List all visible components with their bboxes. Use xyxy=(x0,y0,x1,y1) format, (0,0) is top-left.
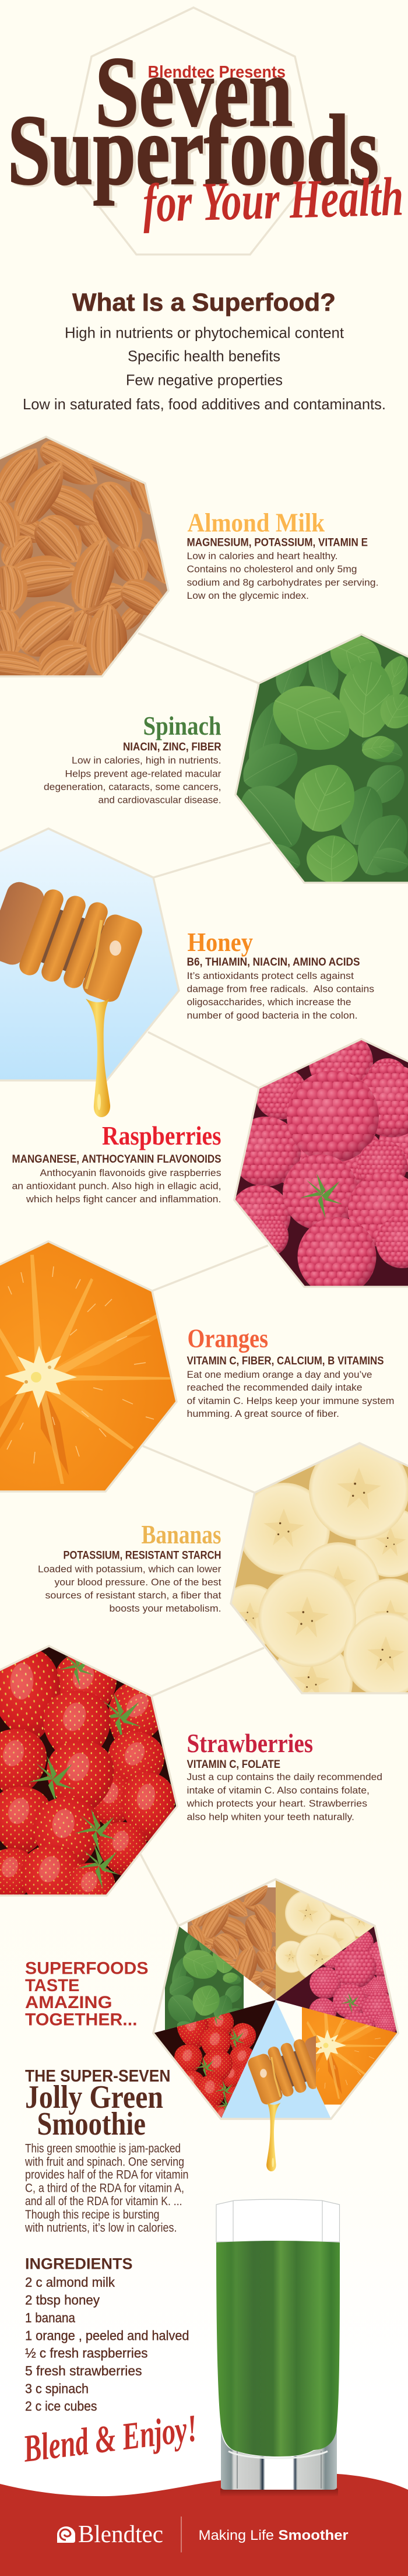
panel: raspberry photo xyxy=(230,1030,408,1296)
icon: honey dipper with drip xyxy=(0,879,145,1117)
spinach description: Helps prevent age-related macular xyxy=(65,768,221,779)
strawberries description: which protects your heart. Strawberries xyxy=(186,1798,367,1809)
panel: recipe heading xyxy=(25,2067,170,2142)
ingredients list: 1 banana xyxy=(25,2310,75,2325)
glass shadow xyxy=(220,2489,338,2497)
recipe description: with fruit and spinach. One serving xyxy=(24,2155,184,2169)
recipe description: with nutrients, it’s low in calories. xyxy=(24,2221,177,2234)
bananas description xyxy=(38,1564,221,1614)
panel: almond milk text xyxy=(187,507,379,601)
ingredients list: 2 tbsp honey xyxy=(25,2293,100,2308)
raspberries description: which helps fight cancer and inflammation. xyxy=(26,1194,221,1205)
honey description: It’s antioxidants protect cells against xyxy=(187,970,354,981)
list of criteria: Low in saturated fats, food additives and contaminants. xyxy=(23,395,386,413)
strawberries description: also help whiten your teeth naturally. xyxy=(187,1811,354,1823)
almond description: sodium and 8g carbohydrates per serving. xyxy=(187,577,379,588)
bananas description: Loaded with potassium, which can lower xyxy=(38,1564,221,1574)
almond description: Low in calories and heart healthy. xyxy=(187,550,338,561)
panel: oranges text xyxy=(187,1324,394,1419)
spinach heading: Spinach xyxy=(143,711,221,740)
spinach description: degeneration, cataracts, some cancers, xyxy=(44,781,221,792)
almond description: Contains no cholesterol and only 5mg xyxy=(187,563,357,575)
oranges nutrients: VITAMIN C, FIBER, CALCIUM, B VITAMINS xyxy=(187,1355,384,1367)
panel: spinach text xyxy=(44,711,221,806)
icon: composite honey dipper xyxy=(248,2036,316,2171)
ingredients list: 2 c almond milk xyxy=(25,2275,115,2290)
almond description xyxy=(187,550,379,601)
ingredients heading: INGREDIENTS xyxy=(25,2255,133,2273)
almond description: Low on the glycemic index. xyxy=(187,590,309,601)
strawberries description: intake of vitamin C. Also contains folate, xyxy=(187,1785,370,1796)
ingredients list xyxy=(25,2275,189,2414)
recipe name: Smoothie xyxy=(37,2106,146,2142)
bananas nutrients: POTASSIUM, RESISTANT STARCH xyxy=(63,1550,221,1561)
honey description: oligosaccharides, which increase the xyxy=(187,996,351,1008)
callout: superfoods taste amazing together: SUPERFOODS xyxy=(25,1959,149,1978)
panel: honey photo xyxy=(0,829,179,1117)
footer band xyxy=(0,2473,408,2576)
ingredients list: 3 c spinach xyxy=(25,2381,89,2396)
recipe description xyxy=(24,2142,189,2234)
callout: blend and enjoy: Blend & Enjoy! xyxy=(20,2407,200,2470)
strawberries heading: Strawberries xyxy=(187,1728,313,1758)
recipe description: provides half of the RDA for vitamin xyxy=(25,2168,189,2182)
honey nutrients: B6, THIAMIN, NIACIN, AMINO ACIDS xyxy=(187,956,360,968)
honey description xyxy=(187,970,374,1021)
spinach nutrients: NIACIN, ZINC, FIBER xyxy=(123,741,221,753)
ingredients list: 2 c ice cubes xyxy=(25,2399,97,2414)
raspberries nutrients: MANGANESE, ANTHOCYANIN FLAVONOIDS xyxy=(12,1153,221,1166)
panel: banana photo xyxy=(230,1442,408,1694)
panel: composite superfoods heptagon xyxy=(152,1868,402,2171)
raspberries heading: Raspberries xyxy=(102,1121,221,1150)
title: presenter line: Blendtec Presents xyxy=(148,63,286,82)
bananas description: boosts your metabolism. xyxy=(110,1603,221,1614)
bananas heading: Bananas xyxy=(141,1519,221,1549)
panel: orange photo xyxy=(0,1236,187,1496)
list of criteria: Specific health benefits xyxy=(128,348,280,365)
ingredients list: ½ c fresh raspberries xyxy=(25,2345,148,2360)
title: main heading xyxy=(8,37,379,206)
raspberries description: Anthocyanin flavonoids give raspberries xyxy=(40,1167,221,1178)
title xyxy=(8,37,404,234)
spinach description: Low in calories, high in nutrients. xyxy=(72,754,221,766)
panel: strawberry photo xyxy=(0,1643,181,1917)
bananas description: your blood pressure. One of the best xyxy=(55,1577,221,1588)
heading: What Is a Superfood? xyxy=(72,289,336,317)
ingredients list: 1 orange , peeled and halved xyxy=(25,2328,189,2343)
panel: almond photo xyxy=(0,436,170,678)
panel: ingredients xyxy=(25,2255,189,2414)
smoothie glass xyxy=(216,2199,340,2497)
callout: superfoods taste amazing together: TASTE xyxy=(25,1976,79,1995)
raspberries description xyxy=(12,1167,221,1205)
callout: superfoods taste amazing together xyxy=(25,1959,149,2029)
glass upper wall xyxy=(216,2199,339,2242)
title: main heading: Seven xyxy=(95,37,293,148)
spinach description: and cardiovascular disease. xyxy=(98,794,221,806)
honey heading: Honey xyxy=(188,927,253,957)
glass base xyxy=(221,2428,337,2490)
oranges description: Eat one medium orange a day and you’ve xyxy=(187,1369,372,1380)
panel: honey text xyxy=(187,927,374,1021)
panel: strawberries text xyxy=(186,1728,382,1823)
recipe description: This green smoothie is jam-packed xyxy=(25,2142,181,2155)
title heptagon outline xyxy=(68,8,319,254)
recipe description: and all of the RDA for vitamin K. ... xyxy=(25,2195,182,2208)
list of criteria: High in nutrients or phytochemical content xyxy=(65,324,344,342)
footer logo and tagline xyxy=(57,2517,348,2553)
spinach description xyxy=(44,754,221,806)
oranges description: humming. A great source of fiber. xyxy=(187,1408,339,1419)
recipe description: C, a third of the RDA for vitamin A, xyxy=(25,2182,184,2195)
list of criteria xyxy=(23,324,386,413)
list of criteria: Few negative properties xyxy=(126,371,283,388)
tagline emphasis: Smoother xyxy=(279,2528,349,2543)
panel: bananas text xyxy=(38,1519,221,1614)
recipe name: Jolly Green xyxy=(25,2079,163,2115)
logo: blendtec swirl xyxy=(57,2526,75,2543)
almond heading: Almond Milk xyxy=(188,507,325,538)
panel: spinach photo xyxy=(226,626,408,886)
recipe kicker: THE SUPER-SEVEN xyxy=(25,2067,170,2086)
strawberries nutrients: VITAMIN C, FOLATE xyxy=(187,1759,280,1771)
raspberries description: an antioxidant punch. Also high in ellagic acid, xyxy=(12,1180,221,1192)
oranges description: reached the recommended daily intake xyxy=(187,1382,363,1393)
bananas description: sources of resistant starch, a fiber that xyxy=(45,1589,221,1601)
honey description: number of good bacteria in the colon. xyxy=(187,1010,358,1021)
ingredients list: 5 fresh strawberries xyxy=(25,2363,142,2378)
panel: what is a superfood xyxy=(23,289,386,413)
green smoothie xyxy=(216,2241,340,2456)
recipe description: Though this recipe is bursting xyxy=(25,2208,160,2221)
callout: superfoods taste amazing together: AMAZING xyxy=(25,1993,112,2012)
tagline: Making Life xyxy=(198,2528,274,2543)
callout: superfoods taste amazing together: TOGETHER... xyxy=(25,2010,138,2029)
honey description: damage from free radicals. Also contains xyxy=(187,983,374,995)
strawberries description xyxy=(186,1771,382,1823)
oranges description: of vitamin C. Helps keep your immune system xyxy=(187,1395,394,1406)
panel: raspberries text xyxy=(12,1121,221,1205)
almond nutrients: MAGNESIUM, POTASSIUM, VITAMIN E xyxy=(187,536,368,549)
recipe name xyxy=(25,2079,163,2142)
logo: wordmark: Blendtec xyxy=(78,2521,163,2548)
oranges description xyxy=(187,1369,394,1419)
oranges heading: Oranges xyxy=(188,1324,268,1353)
strawberries description: Just a cup contains the daily recommended xyxy=(187,1771,382,1782)
